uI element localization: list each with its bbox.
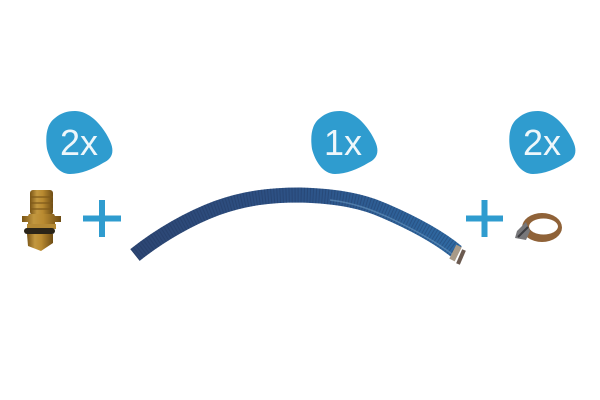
badge: 1x hose: 1x xyxy=(324,122,362,163)
badge: 2x fittings: 2x xyxy=(60,122,98,163)
icon: plus right xyxy=(466,200,503,237)
badge: 2x clamps: 2x xyxy=(523,122,561,163)
icon: brass fitting xyxy=(22,190,61,251)
icon: corrugated blue hose xyxy=(135,195,464,264)
badge: 1x hose xyxy=(311,111,377,174)
badge: 2x clamps xyxy=(509,111,575,174)
icon: hose clamp xyxy=(515,213,562,242)
icon: plus left xyxy=(83,200,121,237)
badge: 2x fittings xyxy=(46,111,112,174)
